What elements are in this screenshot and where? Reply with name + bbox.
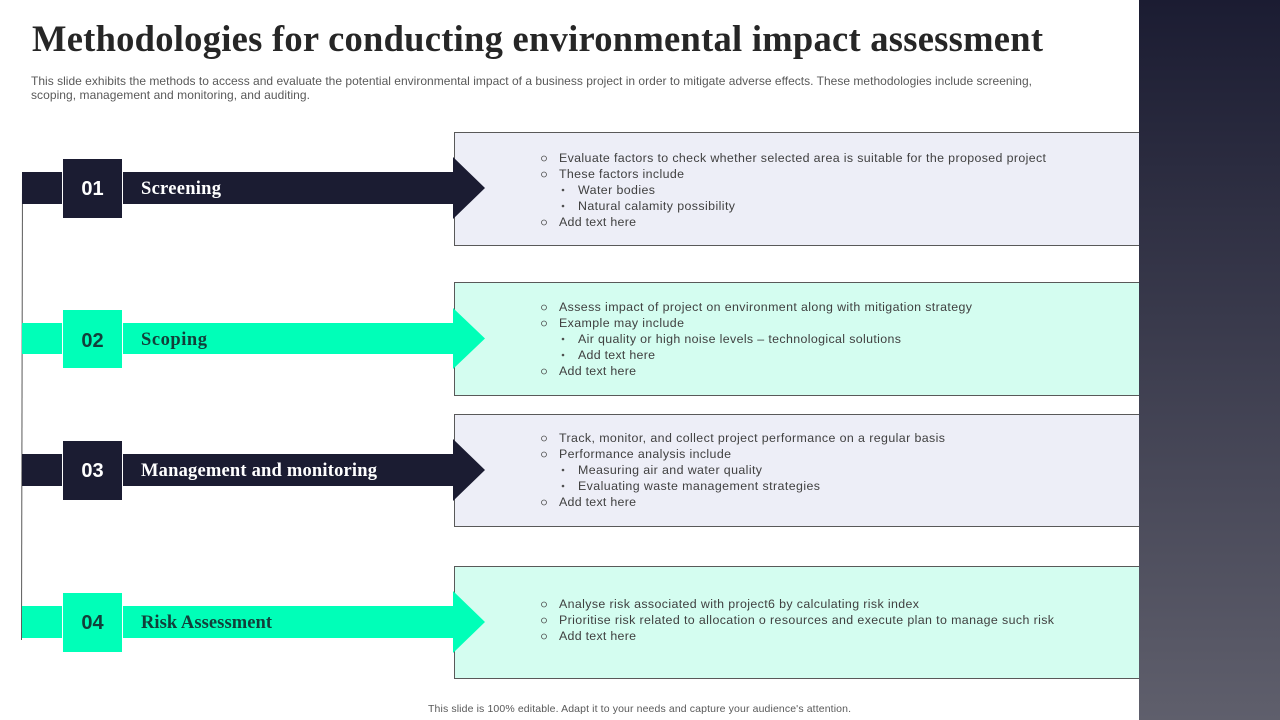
panel: screening details: Water bodies [578, 183, 655, 197]
panel: management details: Add text here [559, 495, 636, 509]
number badge 02: 02 [81, 330, 104, 352]
panel: screening details: These factors include [559, 167, 684, 181]
subtitle [31, 74, 1032, 102]
label: scoping: Scoping [141, 330, 208, 350]
panel: management details: Measuring air and water quality [578, 463, 763, 477]
panel: screening details: Add text here [559, 215, 636, 229]
step 04: risk assessment [22, 591, 485, 653]
panel: screening details: Natural calamity possibility [578, 199, 736, 213]
label: risk assessment: Risk Assessment [141, 613, 273, 633]
timeline vertical line [22, 172, 23, 640]
label: management and monitoring: Management and monitoring [141, 461, 378, 481]
right sidebar [1139, 0, 1280, 720]
panel: screening details: Evaluate factors to check whether selected area is suitable for the proposed project [559, 151, 1047, 165]
label: screening: Screening [141, 179, 222, 199]
number badge 04: 04 [81, 612, 104, 634]
title: Methodologies for conducting environmental impact assessment [32, 18, 1043, 59]
arrow: management [22, 439, 485, 501]
step 02: scoping [22, 308, 485, 369]
panel: risk assessment details: Add text here [559, 629, 636, 643]
panel: screening details [454, 132, 1144, 246]
number badge 01 [62, 159, 123, 219]
panel: risk assessment details: Prioritise risk related to allocation o resources and execute plan to manage such risk [559, 613, 1055, 627]
subtitle: scoping, management and monitoring, and auditing. [31, 88, 310, 102]
panel: scoping details: Add text here [578, 348, 655, 362]
number badge 01: 01 [81, 178, 104, 200]
panel: scoping details: Example may include [559, 316, 684, 330]
arrow: screening [22, 157, 485, 219]
number badge 03: 03 [81, 460, 104, 482]
step 03: management and monitoring [22, 439, 485, 501]
panel: scoping details: Assess impact of project on environment along with mitigation strategy [559, 300, 973, 314]
panel: management details [454, 414, 1144, 526]
footer note: This slide is 100% editable. Adapt it to your needs and capture your audience's attention. [428, 703, 851, 715]
panel: scoping details [454, 282, 1144, 396]
panel: management details: Performance analysis include [559, 447, 731, 461]
panel: risk assessment details [454, 566, 1144, 678]
panel: scoping details: Add text here [559, 364, 636, 378]
arrow: risk assessment [22, 591, 485, 653]
arrow: scoping [22, 308, 485, 369]
panel: management details: Evaluating waste management strategies [578, 479, 820, 493]
step 01: screening [22, 157, 485, 219]
panel: management details: Track, monitor, and collect project performance on a regular basis [559, 431, 945, 445]
number badge 03 [62, 441, 123, 501]
number badge 04 [62, 593, 123, 653]
panel: scoping details: Air quality or high noise levels – technological solutions [578, 332, 901, 346]
number badge 02 [62, 310, 123, 369]
panel: risk assessment details: Analyse risk associated with project6 by calculating risk index [559, 597, 920, 611]
subtitle: This slide exhibits the methods to access and evaluate the potential environmental impact of a business project in order to mitigate adverse effects. These methodologies include screening, [31, 74, 1032, 88]
